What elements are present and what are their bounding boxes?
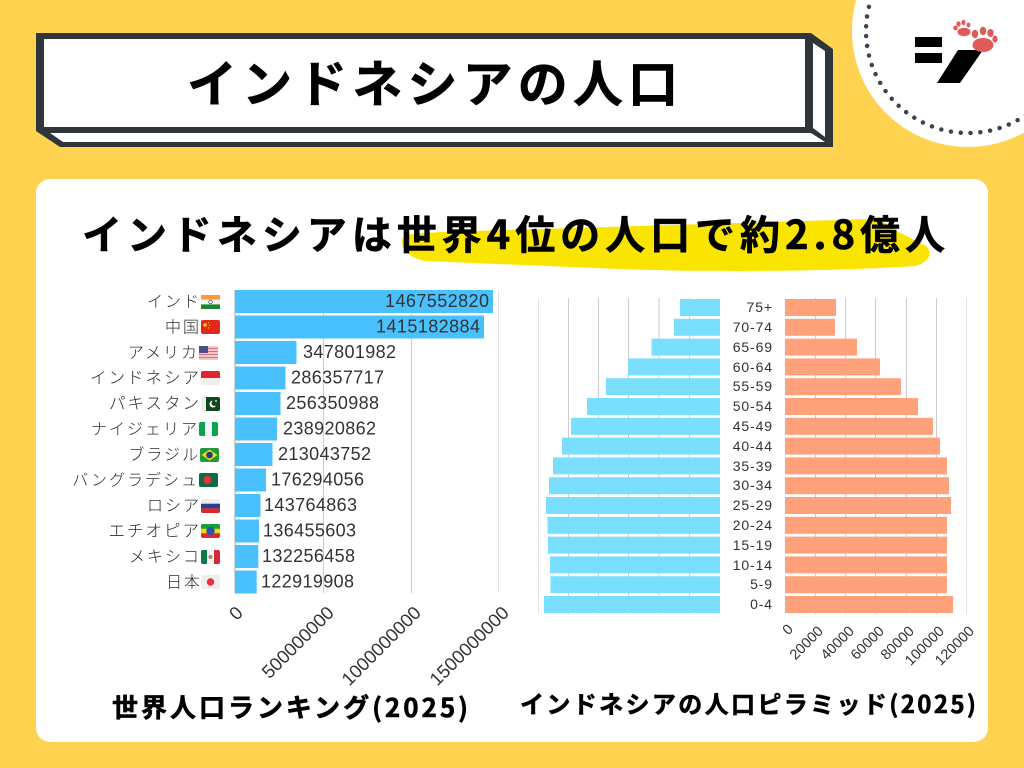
pyramid x axis labels: 120000 [932, 624, 978, 669]
pyramid x axis labels: 80000 [878, 624, 918, 663]
country labels [72, 288, 202, 592]
flag: Bangladesh [199, 473, 218, 487]
value labels: 1467552820 [385, 291, 489, 311]
value labels [261, 291, 489, 592]
value labels: 213043752 [278, 444, 371, 464]
value labels: 347801982 [303, 342, 396, 362]
value labels: 1415182884 [376, 316, 480, 336]
age labels [733, 299, 773, 612]
male bars [544, 299, 720, 613]
country labels: 中国 [165, 314, 201, 338]
chart title: pyramid: インドネシアの人口ピラミッド(2025) [520, 685, 976, 720]
value labels: 143764863 [264, 495, 357, 515]
title: インドネシアの人口 [187, 45, 678, 117]
age labels: 15-19 [733, 537, 773, 553]
age labels: 65-69 [733, 339, 773, 355]
chart: world population ranking [72, 288, 513, 690]
country labels: ナイジェリア [91, 416, 199, 440]
flags [199, 295, 220, 589]
age labels: 5-9 [750, 576, 773, 592]
country labels: メキシコ [129, 543, 201, 567]
pyramid x axis labels: 40000 [818, 624, 858, 663]
country labels: ロシア [147, 492, 201, 516]
headline: インドネシアは世界4位の人口で約2.8億人 [82, 203, 945, 261]
female bars [785, 299, 953, 613]
pyramid x axis labels: 100000 [902, 624, 948, 669]
flag: Russia [201, 499, 220, 513]
age labels: 55-59 [733, 378, 773, 394]
value labels: 132256458 [262, 546, 355, 566]
age labels: 50-54 [733, 398, 773, 414]
flag: Nigeria [199, 422, 218, 436]
flag: Mexico [201, 550, 220, 564]
x axis labels: 500000000 [257, 602, 338, 682]
age labels: 70-74 [733, 319, 773, 335]
main white panel [36, 179, 988, 742]
age labels: 30-34 [733, 477, 773, 493]
country labels: バングラデシュ [72, 466, 199, 490]
bars [235, 290, 493, 594]
flag: China [201, 320, 220, 334]
age labels: 45-49 [733, 418, 773, 434]
value labels: 122919908 [261, 572, 354, 592]
flag: Pakistan [201, 397, 220, 411]
age labels: 35-39 [733, 458, 773, 474]
country labels: ブラジル [128, 441, 200, 465]
flag: Indonesia [201, 371, 220, 385]
flag: USA [199, 346, 218, 360]
chart: Indonesia population pyramid [538, 298, 978, 669]
pyramid x axis labels [780, 622, 978, 669]
value labels: 136455603 [263, 520, 356, 540]
age labels: 20-24 [733, 517, 773, 533]
pyramid x axis labels: 60000 [848, 624, 888, 663]
pyramid x axis labels: 20000 [787, 624, 827, 663]
country labels: アメリカ [128, 339, 199, 363]
value labels: 256350988 [286, 393, 379, 413]
chart title: ranking: 世界人口ランキング(2025) [112, 688, 468, 725]
age labels: 0-4 [750, 596, 773, 612]
age labels: 60-64 [733, 359, 773, 375]
country labels: 日本 [166, 568, 202, 592]
corner logo badge [852, 0, 1024, 147]
highlight marker stroke [402, 219, 930, 271]
flag: Ethiopia [201, 524, 220, 538]
pyramid x axis labels: 0 [780, 622, 797, 639]
country labels: インドネシア [90, 364, 201, 388]
flag: Brazil [200, 448, 219, 462]
age labels: 40-44 [733, 438, 773, 454]
country labels: パキスタン [109, 390, 201, 414]
x axis labels: 1000000000 [337, 602, 425, 690]
x axis labels: 0 [225, 602, 247, 624]
flag: Japan [201, 575, 220, 589]
x axis labels [225, 602, 513, 690]
value labels: 176294056 [271, 470, 364, 490]
value labels: 286357717 [291, 368, 384, 388]
x axis labels: 1500000000 [425, 602, 513, 690]
value labels: 238920862 [283, 418, 376, 438]
age labels: 75+ [747, 299, 773, 315]
title banner [36, 33, 833, 147]
country labels: インド [147, 288, 201, 312]
age labels: 25-29 [733, 497, 773, 513]
age labels: 10-14 [733, 557, 773, 573]
flag: India [201, 295, 220, 309]
country labels: エチオピア [108, 518, 201, 542]
